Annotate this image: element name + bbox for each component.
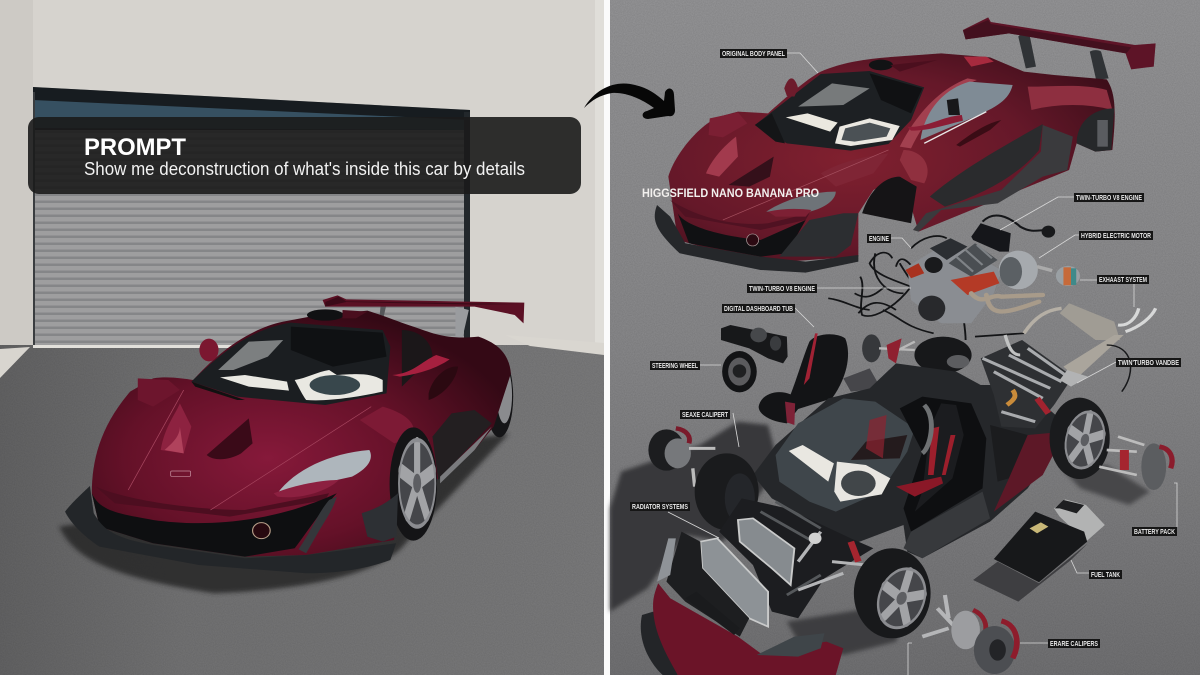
rear right wheel <box>1050 398 1110 479</box>
body highlights <box>821 78 1112 187</box>
lower chassis and parts <box>610 325 1172 675</box>
panel: original photo <box>0 0 604 675</box>
label: hybrid electric motor <box>1079 231 1153 240</box>
label: battery pack: BATTERY PACK <box>1134 529 1175 536</box>
muffler and pipes <box>1024 303 1156 340</box>
label: radiator systems: RADIATOR SYSTEMS <box>632 504 688 511</box>
prompt heading: PROMPT <box>84 134 186 161</box>
roller door <box>33 87 470 345</box>
coilover and arms <box>798 532 866 590</box>
steering wheel <box>722 351 757 392</box>
front subframe <box>719 498 873 618</box>
front left wheel <box>695 453 759 530</box>
roof scoop <box>307 309 367 321</box>
callout leader lines <box>668 53 1177 675</box>
front right wheel <box>854 548 932 638</box>
turbo compressor box with cable <box>971 215 1055 252</box>
hybrid electric motor <box>999 251 1052 289</box>
driveway ground <box>0 345 604 675</box>
label: twin-turbo v8 engine left <box>747 284 817 293</box>
heading: model name: HIGGSFIELD NANO BANANA PRO <box>642 188 819 200</box>
racing seat <box>759 333 848 425</box>
white divider <box>604 0 610 675</box>
label: brake caliper: SEAXE CALIPERT <box>682 412 729 419</box>
hood highlights <box>96 378 414 517</box>
label: original body panel <box>720 49 787 58</box>
lower dark intake <box>92 493 337 557</box>
canopy glass <box>776 398 915 512</box>
label: battery pack <box>1132 527 1177 536</box>
spoiler <box>963 17 1156 80</box>
label: brake calipers <box>1048 639 1100 648</box>
ground shadow <box>610 422 779 612</box>
headlight <box>766 192 836 217</box>
splitter <box>655 205 858 273</box>
label: fuel tank: FUEL TANK <box>1091 572 1120 579</box>
rear suspension unit <box>862 334 915 363</box>
label: original body panel: ORIGINAL BODY PANEL <box>722 51 786 58</box>
label: digital dashboard tub <box>722 304 795 313</box>
rear wing <box>323 295 524 343</box>
rear wheel <box>486 356 513 437</box>
prompt callout <box>28 117 581 194</box>
label: twin-turbo v8 engine left: TWIN-TURBO V8 ENGINE <box>749 286 815 293</box>
label: engine <box>867 234 891 243</box>
front subframe detail <box>761 502 821 595</box>
battery pack <box>973 499 1105 602</box>
rear right brake assembly <box>1099 437 1172 490</box>
engine block <box>905 238 1001 323</box>
dashboard <box>721 325 788 363</box>
original car <box>59 295 524 593</box>
wheel arches <box>862 108 1114 223</box>
panel: deconstruction render <box>610 0 1200 675</box>
body <box>92 311 511 557</box>
rear upper wheel <box>914 337 972 373</box>
label: engine: ENGINE <box>869 236 889 243</box>
asphalt background <box>610 0 1200 675</box>
label: exhaust system: EXHAAST SYSTEM <box>1099 277 1147 284</box>
side windows and mirror <box>784 78 1013 147</box>
label: twin-turbo rear <box>1116 358 1181 367</box>
left brake assembly <box>648 428 715 487</box>
body shell <box>668 53 1115 263</box>
door with maroon skin <box>990 425 1065 512</box>
label: brake caliper <box>680 410 730 419</box>
label: fuel tank <box>1089 570 1122 579</box>
door opening and driver seat <box>896 397 986 532</box>
engine wiring harness <box>828 236 1024 340</box>
windshield <box>755 71 924 151</box>
front opening <box>678 213 806 257</box>
label: twin-turbo rear: TWIN'TURBO VANDBE <box>1118 360 1179 367</box>
prompt text: Show me deconstruction of what's inside this car by details <box>84 159 525 179</box>
label: digital dashboard tub: DIGITAL DASHBOARD TUB <box>724 306 793 313</box>
label: hybrid electric motor: HYBRID ELECTRIC MOTOR <box>1081 233 1151 240</box>
bottom brake assembly <box>922 595 1017 674</box>
door carbon panel <box>913 124 1073 232</box>
label: steering wheel: STEERING WHEEL <box>652 363 699 370</box>
front splitter <box>65 486 396 573</box>
garage wall <box>0 0 604 350</box>
label: twin-turbo v8 engine upper <box>1074 193 1144 202</box>
label: exhaust system <box>1097 275 1149 284</box>
badge and tow eye <box>171 471 270 539</box>
upper complete body shell <box>655 17 1156 340</box>
detached front clip <box>641 532 843 675</box>
headlight <box>274 450 371 497</box>
side intake <box>429 366 492 483</box>
front wheel <box>390 427 437 541</box>
hood details <box>670 112 888 230</box>
label: brake calipers: ERARE CALIPERS <box>1050 641 1098 648</box>
arrow: from photo to render <box>584 84 675 119</box>
engine bay <box>981 335 1131 428</box>
exhaust part <box>1056 266 1080 286</box>
monocoque chassis <box>753 363 1065 558</box>
car shadow <box>59 433 509 593</box>
radiators <box>700 518 794 627</box>
label: radiator systems <box>630 502 690 511</box>
roof scoop <box>869 57 994 72</box>
windshield and cabin <box>191 323 390 405</box>
label: steering wheel <box>650 361 700 370</box>
headers <box>971 293 1043 311</box>
label: twin-turbo v8 engine upper: TWIN-TURBO V8 ENGINE <box>1076 195 1142 202</box>
sill <box>904 492 990 558</box>
side window and mirror <box>199 330 450 387</box>
